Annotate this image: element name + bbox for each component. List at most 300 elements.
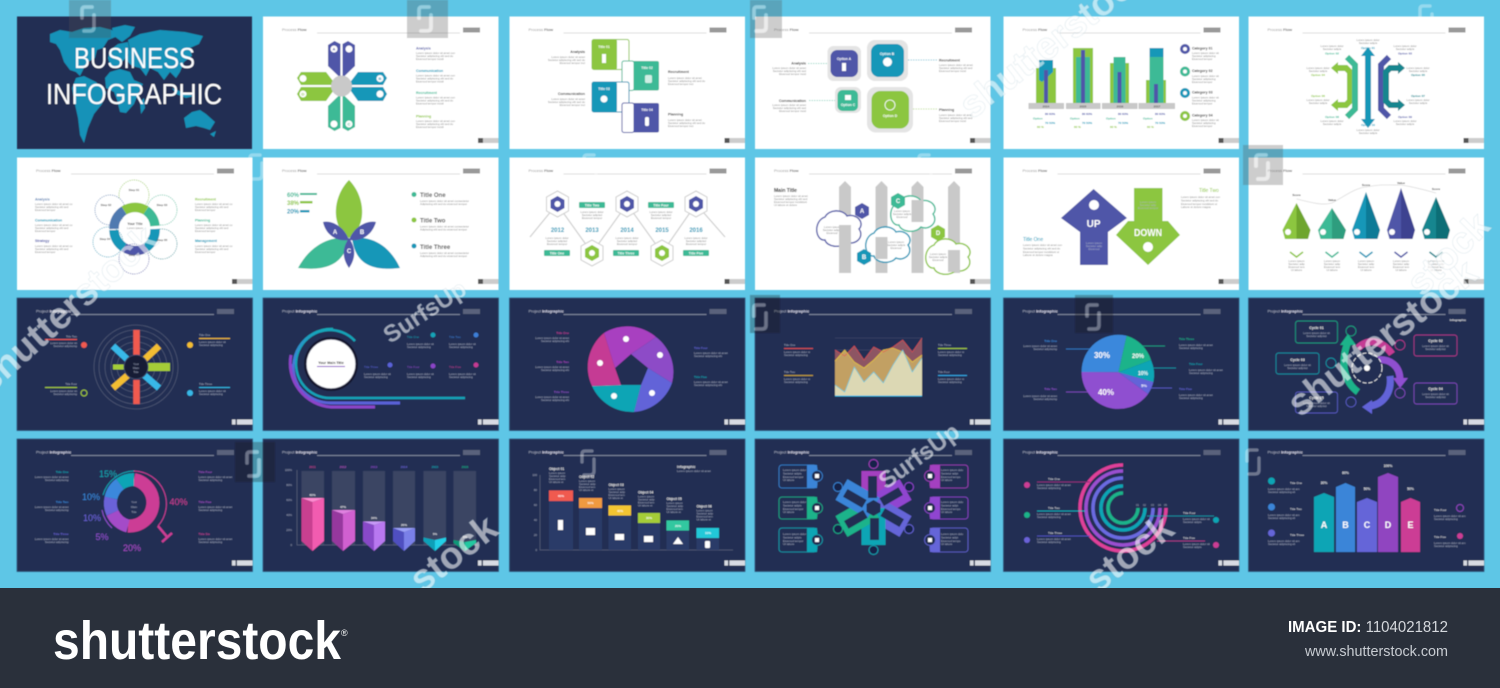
column text: Eiusmod tem: [1428, 265, 1445, 269]
option labels: Option 07: [1411, 94, 1425, 98]
legend text: Title One: [420, 193, 446, 199]
node circles: [834, 460, 914, 554]
year axis: 2015: [1080, 104, 1087, 108]
left labels: Sectetur adipiscing: [1037, 486, 1061, 490]
column text: Sectetur adip: [1288, 262, 1305, 266]
left text: Sectetur adipiscing: [45, 540, 69, 544]
pie segments: [588, 326, 673, 412]
left text: Eiusmod tempor: [35, 208, 55, 212]
axis: 20: [534, 533, 537, 537]
percentages: 10%: [82, 492, 100, 502]
legend left: Lorem ipsum dolor si: [784, 377, 810, 381]
right text: Lorem ipsum dolor sit amet co: [195, 202, 232, 206]
legend: Sectetur adipiscing: [1192, 98, 1216, 102]
percent labels: 50%: [1364, 487, 1370, 491]
value boxes: [549, 490, 719, 538]
object titles: Sectetur adip: [608, 490, 625, 494]
left labels: Sectetur adipiscing elit: [541, 339, 569, 343]
right text: Title Six: [198, 532, 210, 536]
text column: Eiusmod tempor incidi: [416, 102, 444, 106]
text column: Lorem ipsum dolor sit amet con: [416, 51, 455, 55]
right labels: Lorem ipsum dolor sit: [1183, 542, 1210, 546]
bar values: 5%: [433, 532, 437, 536]
left text: Lorem ipsum dolor sit amet co: [35, 244, 72, 248]
value boxes: 50%: [587, 501, 594, 505]
labels: Eiusmod tempor incid: [779, 109, 806, 113]
object titles: Object 04: [638, 490, 653, 494]
left text: Lorem ipsum dolor sit am: [1268, 487, 1299, 491]
column text: Lorem ipsum: [1288, 259, 1305, 263]
plot area: [835, 338, 922, 396]
labels: Sectetur adipiscing: [1033, 397, 1057, 401]
right labels: Sectetur adipiscing elit: [694, 383, 722, 387]
values: 70 50%: [1155, 121, 1166, 125]
column text: Sectetur adip: [1428, 262, 1445, 266]
object titles: Sectetur adip: [638, 498, 655, 502]
value boxes: 20%: [675, 524, 681, 528]
years: 2014: [401, 465, 408, 469]
hexagon letters: A: [860, 209, 865, 215]
clouds: Sectetur adipis: [929, 255, 948, 259]
left text: Sectetur adipiscing: [45, 478, 69, 482]
right labels: 05: [1164, 503, 1167, 507]
percent labels: 50%: [1407, 487, 1414, 491]
text column: Sectetur adipiscing elit sed do: [416, 98, 454, 102]
petal labels: Step 01: [129, 188, 140, 192]
value boxes: 30%: [646, 516, 652, 520]
left labels: Title Three: [554, 390, 569, 394]
column text: Ut labore: [1430, 268, 1442, 272]
legend text: Adipiscing elit sed do eiusmod tempor: [420, 228, 467, 232]
clouds: Eiusmod: [891, 246, 902, 250]
petal labels: Step 03: [157, 203, 168, 207]
text items: Lorem ipsum dolor sit: [449, 342, 476, 346]
center hub: Title: [133, 370, 139, 374]
right text: Title Four: [198, 470, 213, 474]
legend: Eiusmod tempor: [1192, 124, 1212, 128]
world map: [50, 25, 216, 143]
column text: Sectetur adip: [1393, 262, 1410, 266]
value boxes: 60%: [558, 494, 564, 498]
cycle text: Cycle 01: [1309, 326, 1324, 330]
text column: Eiusmod tempor incidi: [416, 125, 444, 129]
title one: [1023, 237, 1062, 257]
text column: [416, 46, 455, 129]
labels: Sectetur adipiscing: [1033, 347, 1057, 351]
petal labels: Step 05: [157, 238, 168, 242]
down arrow: Lorem ipsum: [1140, 200, 1156, 204]
website: www.shutterstock.com: [1304, 644, 1448, 660]
labels: Eiusmod tempor inci: [668, 124, 694, 128]
arrow columns: B: [1342, 520, 1349, 530]
title two: Sectetur adipiscing elit sed do: [1181, 198, 1219, 202]
title two: Labore et dolore magna: [1181, 205, 1211, 209]
legend right: Sectetur adipiscing: [938, 380, 962, 384]
cycle text: Lorem ipsum dolor sit: [1422, 392, 1449, 396]
right labels: Lorem ipsum dolor sit: [1183, 517, 1210, 521]
legend: Lorem ipsum dolor sit: [1192, 51, 1219, 55]
option text: Lorem ipsum dolor: [1356, 38, 1380, 42]
axis: [285, 468, 478, 547]
right labels: Title One: [199, 333, 211, 337]
legend: Category 02: [1192, 69, 1213, 73]
right text: [1434, 504, 1466, 548]
text column: Lorem ipsum dolor sit amet con: [416, 119, 455, 123]
watermarks: stock: [1078, 506, 1182, 601]
labels: Title Four: [1189, 362, 1203, 366]
panel: arrows diagram: [1248, 16, 1484, 149]
right labels: Sectetur adipis: [1183, 520, 1202, 524]
labels: Lorem ipsum dolor sit amet: [939, 63, 973, 67]
column text: Lorem ipsum: [1358, 259, 1374, 263]
column text: Lorem ipsum: [1428, 259, 1444, 263]
values: 80 60%: [1082, 112, 1093, 116]
right labels: Title Five: [694, 375, 707, 379]
column icons: [558, 520, 710, 548]
center title: Main: [131, 505, 137, 509]
left text: Title One: [56, 470, 69, 474]
panel: 3d bar chart: [263, 439, 498, 572]
hexagon letters: B: [862, 255, 867, 261]
object titles: Object 02: [579, 475, 594, 479]
object titles: Object 01: [549, 467, 564, 471]
text items: Sectetur adipiscing: [407, 345, 431, 349]
labels: Sectetur adipiscing: [1179, 396, 1203, 400]
down arrow: [1116, 188, 1180, 265]
text column: Eiusmod tempor incidi: [416, 80, 444, 84]
values: 60 %: [1037, 125, 1044, 129]
watermarks: stock: [1399, 204, 1499, 304]
clouds: Sectetur adipis: [823, 228, 842, 232]
option text: [1306, 38, 1430, 135]
up arrow: Eiusmod: [1089, 247, 1100, 251]
left labels: Title One: [1048, 477, 1060, 481]
year axis: 2016: [1117, 104, 1124, 108]
labels: Sectetur adipiscing elit sed: [773, 69, 806, 73]
main title: Ut labore et dolore: [774, 203, 797, 207]
registered mark: ®: [341, 628, 348, 638]
title chips: Title Five: [689, 251, 703, 255]
left text: Strategy: [35, 239, 49, 243]
cycle text: Infographic: [1450, 318, 1466, 322]
panel: up and down arrows: [1004, 158, 1239, 290]
object titles: Sectetur adip: [579, 482, 596, 486]
right text: Planning: [195, 218, 210, 222]
legend left: Title Two: [784, 370, 795, 374]
right boxes: Lorem ipsum dolo: [941, 468, 963, 472]
left text: Sectetur adipiscing eli: [1268, 542, 1296, 546]
labels: Sectetur adipiscing elit sed: [939, 116, 973, 120]
left text: Title Three: [53, 532, 69, 536]
legend: Category 03: [1192, 90, 1213, 94]
panel: business infographic cover: [17, 16, 252, 149]
pyramids: [1282, 188, 1450, 239]
clouds: Lorem ipsum: [894, 209, 910, 213]
legend right: Lorem ipsum dolor si: [938, 350, 964, 354]
years: 2014: [620, 228, 634, 234]
left text: [35, 198, 73, 254]
left labels: Lorem ipsum dolor sit amet: [535, 395, 569, 399]
option boxes: Title 03: [598, 87, 610, 91]
timeline text: Sectetur adipisci: [686, 239, 707, 243]
year axis: 2014: [1043, 104, 1050, 108]
left text: Sectetur adipiscing elit sed: [35, 247, 69, 251]
legend: Sectetur adipiscing: [1192, 77, 1216, 81]
left boxes: Eiusmod tempor: [783, 507, 803, 511]
right boxes: [924, 465, 968, 552]
center hub: Your: [133, 362, 139, 366]
petals: B: [360, 230, 365, 236]
left labels: Sectetur adipiscing elit: [541, 368, 569, 372]
option labels: Option 01: [1361, 46, 1375, 50]
right text: Lorem ipsum dolor sit amet: [198, 475, 232, 479]
years: 2013: [585, 228, 599, 234]
labels: Lorem ipsum dolor sit amet: [1179, 393, 1213, 397]
left labels: Lorem ipsum dolor sit amet: [1037, 512, 1071, 516]
left labels: [535, 331, 569, 402]
infographic note: Lorem ipsum dolor sit amet: [677, 469, 711, 473]
column text: Ut labore: [1360, 268, 1372, 272]
right boxes: Eiusmod tempo: [941, 539, 961, 543]
down arrow: Eiusmod tempor: [1138, 206, 1158, 210]
column text: Eiusmod tem: [1288, 265, 1305, 269]
option text: Lorem ipsum dolor: [1320, 44, 1344, 48]
legend text: Lorem ipsum dolor sit amet consectetur: [420, 224, 469, 228]
text items: [364, 332, 478, 379]
cycle text: Cycle 02: [1428, 339, 1443, 343]
right text: Title Four: [1434, 508, 1447, 512]
years: 2015: [655, 228, 669, 234]
left boxes: Ut labore: [783, 542, 795, 546]
title chips: [544, 202, 709, 256]
up arrow: [1061, 189, 1127, 265]
petals: A: [333, 230, 338, 236]
object titles: Lorem ipsum: [638, 494, 654, 498]
option text: Lorem ipsum dolor: [1406, 98, 1430, 102]
legend left: Title One: [784, 343, 796, 347]
hexagon letters: [855, 193, 945, 265]
down arrow: Sectetur adip: [1140, 203, 1157, 207]
title: INFOGRAPHIC: [46, 79, 222, 111]
legend: Sectetur adipiscing: [1192, 121, 1216, 125]
right boxes: Ut labore: [941, 510, 953, 514]
right labels: Title Three: [199, 382, 213, 386]
stats: 60%: [287, 193, 300, 199]
labels: Lorem ipsum dolor sit amet: [772, 66, 806, 70]
right text: Lorem ipsum dolor sit am: [1434, 514, 1465, 518]
text column: Eiusmod tempor incidi: [416, 57, 444, 61]
text items: Title Five: [449, 365, 461, 369]
infographic note: [677, 465, 711, 473]
option text: Sectetur adipis: [1359, 131, 1378, 135]
left labels: Lorem ipsum dolor sit: [50, 389, 77, 393]
option text: Sectetur adipis: [1409, 69, 1428, 73]
legend: Eiusmod tempor: [1192, 80, 1212, 84]
percentages: 20%: [123, 543, 141, 553]
left text: Title Three: [1290, 533, 1305, 537]
legend text: Lorem ipsum dolor sit amet consectetur: [420, 251, 469, 255]
labels: Lorem ipsum dolor sit amet: [551, 55, 585, 59]
infographic note: Infographic: [677, 465, 696, 469]
option labels: Option 05: [1411, 73, 1425, 77]
values: Option: [1106, 116, 1116, 120]
left boxes: Ut labore: [783, 510, 795, 514]
labels: Eiusmod tempor inci: [668, 82, 694, 86]
text items: Title Three: [364, 365, 379, 369]
star arms: [835, 471, 912, 545]
right boxes: Lorem ipsum dolo: [941, 500, 963, 504]
object titles: Ut labore et: [579, 488, 594, 492]
column text: Eiusmod tem: [1358, 265, 1375, 269]
right text: Management: [195, 239, 218, 243]
panel: radial diagram: [17, 298, 252, 430]
slides grid: [17, 16, 1484, 572]
legend right: [938, 343, 967, 384]
title chips: Title Four: [653, 203, 669, 207]
left labels: Title One: [556, 331, 569, 335]
title one: Sectetur adipiscing elit sed do: [1023, 246, 1061, 250]
timeline text: Eiusmod tempor: [686, 242, 706, 246]
right text: Sectetur adipiscing: [198, 478, 223, 482]
legend text: Adipiscing elit sed do eiusmod tempor: [420, 254, 467, 258]
object titles: Ut labore et: [696, 518, 711, 522]
left labels: Lorem ipsum dolor sit amet: [1037, 483, 1071, 487]
flower diagram: D: [302, 92, 305, 96]
left text: Sectetur adipiscing elit sed: [35, 205, 69, 209]
left labels: Title Three: [1048, 531, 1063, 535]
legend: Lorem ipsum dolor sit: [1192, 118, 1219, 122]
left text: Lorem ipsum dolor sit amet co: [35, 202, 72, 206]
object titles: Object 05: [666, 497, 682, 501]
column text: Eiusmod tem: [1324, 265, 1341, 269]
panel: clouds and arrows: [755, 158, 990, 290]
panel: building bar chart: [1004, 16, 1239, 149]
axis: 40%: [286, 513, 293, 517]
labels: Communication: [558, 92, 585, 96]
left labels: Title Four: [65, 382, 77, 386]
right text: Sectetur adipiscing elit sed: [195, 226, 229, 230]
text items: Title Two: [449, 335, 461, 339]
axis: 80%: [286, 483, 293, 487]
column text: Eiusmod tem: [1393, 265, 1410, 269]
pyramid labels: Value: [1328, 198, 1336, 202]
clouds: Lorem ipsum: [888, 240, 904, 244]
pyramid labels: Score: [1432, 187, 1440, 191]
right text: Recruitment: [195, 198, 217, 202]
text column: Lorem ipsum dolor sit amet con: [416, 96, 455, 100]
title chips: Title Two: [585, 203, 599, 207]
right labels: Lorem ipsum dolor sit amet: [694, 351, 728, 355]
grey arrows: [839, 181, 960, 273]
left labels: Lorem ipsum dolor sit: [50, 341, 77, 345]
up arrow: UP: [1087, 219, 1101, 230]
option boxes: [592, 40, 659, 132]
pyramid labels: [1292, 181, 1440, 202]
axis: 20%: [286, 528, 293, 532]
center title: Your Main Title: [318, 361, 344, 365]
left boxes: Ut labore: [783, 478, 795, 482]
center title: Title: [131, 510, 137, 514]
option labels: Option 06: [1311, 94, 1325, 98]
panel: leaf petals: [263, 158, 498, 290]
legend: Eiusmod tempor: [1192, 102, 1212, 106]
right labels: Lorem ipsum dolor sit: [199, 340, 226, 344]
panel: rounded squares: [755, 16, 990, 149]
right boxes: Sectetur adipi: [941, 503, 958, 507]
right labels: Lorem ipsum dolor sit: [199, 389, 226, 393]
timeline text: Sectetur adipisci: [582, 213, 603, 217]
right boxes: Sectetur adipi: [941, 471, 958, 475]
object titles: Ut labore et: [638, 504, 653, 508]
years: 2015: [432, 465, 439, 469]
left boxes: Lorem ipsum dolor: [783, 500, 806, 504]
values: Option: [1143, 116, 1153, 120]
values: 80 60%: [1155, 112, 1166, 116]
panel: six petal cycle: [17, 158, 252, 290]
pie: 20%: [1132, 354, 1145, 360]
legend: Lorem ipsum dolor sit: [1192, 96, 1219, 100]
petals: [298, 180, 400, 269]
flower diagram: B: [379, 76, 382, 81]
text items: Lorem ipsum dolor sit: [364, 372, 391, 376]
dashed circles: [93, 180, 177, 274]
percentages: 40%: [169, 497, 188, 507]
footer bar: [0, 588, 1500, 688]
labels: Eiusmod tempor inci: [560, 61, 585, 65]
value boxes: 40%: [617, 509, 623, 513]
legend: [1180, 44, 1219, 128]
stats: 38%: [287, 201, 300, 207]
legend text: Title Two: [420, 218, 446, 224]
column text: Ut labore: [1291, 268, 1303, 272]
legend right: Title Three: [938, 343, 952, 347]
arrow columns: A: [1321, 520, 1328, 530]
timeline text: Eiusmod tempor: [617, 242, 637, 246]
timeline text: Eiusmod tempor: [582, 216, 602, 220]
object titles: Eiusmod tem: [579, 485, 596, 489]
axis: 80: [534, 488, 537, 492]
pyramid labels: Value: [1397, 181, 1405, 185]
clouds: Eiusmod: [827, 231, 838, 235]
left labels: Title Two: [66, 334, 77, 338]
option text: Sectetur adipis: [1323, 47, 1342, 51]
axis: 0: [290, 543, 292, 547]
pie: 10%: [1138, 371, 1149, 377]
cycle text: Lorem ipsum dolor sit: [1303, 401, 1330, 405]
right labels: Title Five: [1183, 536, 1195, 540]
right labels: Sectetur adipis: [1183, 545, 1202, 549]
object titles: Object 03: [608, 483, 624, 487]
object titles: Sectetur adip: [666, 504, 683, 508]
bar values: 60%: [309, 493, 316, 497]
pie: 5%: [1141, 383, 1147, 388]
clouds: Sectetur adipis: [893, 212, 912, 216]
panel: concentric arcs: [1004, 439, 1239, 572]
panel: pentagon pie: [510, 298, 745, 430]
object titles: Lorem ipsum: [579, 479, 595, 483]
pyramid labels: Score: [1362, 183, 1370, 187]
image id: IMAGE ID: 1104021812: [1288, 619, 1448, 636]
right text: Sectetur adipiscing elit sed: [195, 205, 229, 209]
cycle text: Cycle 05: [1309, 396, 1324, 400]
right labels: 02: [1143, 503, 1146, 507]
percent labels: 60%: [1342, 471, 1349, 475]
flower diagram: C: [348, 122, 351, 126]
left labels: Sectetur adipiscing: [1037, 540, 1061, 544]
panel: donut with percentages: [17, 439, 252, 572]
right labels: [187, 333, 230, 396]
timeline text: Eiusmod tempor: [547, 242, 567, 246]
